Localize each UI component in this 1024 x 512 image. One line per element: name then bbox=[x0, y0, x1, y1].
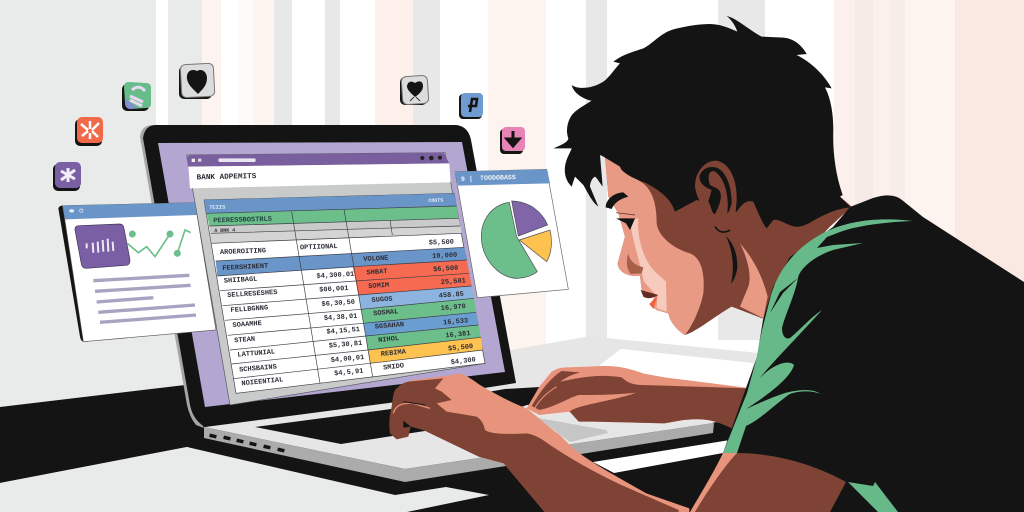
spreadsheet table: SGSAHAN bbox=[375, 321, 404, 332]
spreadsheet table: SOAAMHE bbox=[232, 320, 262, 330]
laptop bbox=[140, 125, 714, 482]
desk and floor surfaces bbox=[0, 336, 770, 512]
spreadsheet table: SUGOS bbox=[371, 296, 393, 305]
floating window: pie chart card: TOODOBASS bbox=[480, 173, 516, 182]
spreadsheet table: $6,500 bbox=[433, 265, 459, 274]
floating window: pie chart card bbox=[455, 169, 568, 298]
eyebrow bbox=[606, 192, 628, 209]
icon: blue app tile bbox=[459, 93, 483, 119]
spreadsheet table: $5,30,81 bbox=[329, 340, 363, 351]
spreadsheet table: STEAN bbox=[234, 336, 255, 345]
spreadsheet table: FEERSHINENT bbox=[222, 263, 269, 273]
person: green shirt highlights bbox=[723, 219, 913, 512]
window heading: BANK ADPEMITS bbox=[197, 173, 257, 182]
spreadsheet table: REBIMA bbox=[380, 348, 407, 359]
spreadsheet table: $6,30,50 bbox=[321, 299, 355, 309]
spreadsheet table: LATTUNIAL bbox=[237, 348, 276, 360]
icon: balloon tile bbox=[179, 63, 215, 99]
spreadsheet table: $00,001 bbox=[319, 285, 349, 295]
laptop lid bbox=[140, 125, 516, 428]
window heading bbox=[188, 163, 451, 188]
spreadsheet table: FELLBGNNG bbox=[230, 304, 269, 315]
icon: purple app tile bbox=[53, 162, 81, 191]
icon: green app tile bbox=[122, 82, 151, 111]
spreadsheet table: SHBAT bbox=[366, 268, 388, 277]
title bar bbox=[187, 153, 449, 167]
text lines bbox=[93, 275, 196, 322]
person: near hand on keyboard bbox=[389, 373, 689, 512]
spreadsheet table: 16,533 bbox=[443, 317, 469, 328]
spreadsheet table: PEERESSBOSTRLS bbox=[213, 216, 272, 225]
spreadsheet table: $4,15,51 bbox=[326, 326, 360, 337]
spreadsheet table: SCHSBAINS bbox=[239, 363, 277, 375]
person: black shirt bbox=[690, 195, 1024, 512]
spreadsheet table: $4,5,91 bbox=[334, 368, 364, 378]
spreadsheet table bbox=[204, 193, 485, 393]
spreadsheet table: $4,38,01 bbox=[324, 313, 358, 323]
spreadsheet table: 10,000 bbox=[432, 252, 457, 261]
spreadsheet table: $5,500 bbox=[448, 343, 474, 354]
spreadsheet table: NOIEENTIAL bbox=[241, 376, 284, 388]
spreadsheet table: COOTS bbox=[428, 198, 443, 204]
spreadsheet table: A BNK 4 bbox=[214, 227, 235, 234]
spreadsheet table: $4,300.01 bbox=[316, 271, 355, 281]
spreadsheet table: $4,00,01 bbox=[331, 354, 365, 365]
spreadsheet table: SHIIBAGL bbox=[224, 276, 258, 286]
icon: orange app tile bbox=[75, 117, 103, 146]
lips bbox=[641, 290, 658, 298]
spreadsheet table: AROEROITING bbox=[220, 247, 266, 257]
face light bbox=[605, 150, 704, 335]
spreadsheet table: SELLRESESHES bbox=[227, 289, 278, 300]
jaw crease bbox=[726, 236, 737, 284]
laptop base bbox=[204, 385, 714, 482]
spreadsheet table: SMIDO bbox=[383, 362, 405, 373]
icon: bar chart tile bbox=[75, 224, 130, 268]
neck and face shadow bbox=[605, 143, 852, 335]
floating window: pie chart card: 9 | bbox=[461, 175, 473, 183]
spreadsheet table: $4,300 bbox=[450, 356, 476, 367]
icon: heart tile bbox=[400, 75, 429, 105]
spreadsheet table: 458.85 bbox=[439, 291, 464, 301]
spreadsheet table: 25,501 bbox=[441, 277, 466, 287]
nose shade bbox=[627, 253, 643, 274]
hair bbox=[553, 16, 851, 228]
pie chart bbox=[481, 201, 551, 278]
spreadsheet table: NIHOL bbox=[378, 335, 399, 345]
spreadsheet table: 16,970 bbox=[441, 303, 466, 313]
spreadsheet table: SOSMAL bbox=[373, 308, 399, 318]
ear bbox=[695, 161, 737, 232]
spreadsheet table: TCIIS bbox=[209, 205, 226, 211]
spreadsheet table: VOLONE bbox=[363, 255, 389, 264]
floating window: analytics card bbox=[58, 203, 216, 342]
browser window with spreadsheet bbox=[187, 153, 485, 405]
spreadsheet table: OPTIIONAL bbox=[300, 243, 338, 252]
person: head bbox=[553, 16, 852, 335]
eye bbox=[616, 218, 635, 230]
line chart bbox=[127, 230, 191, 257]
person: forearm crossing shirt bbox=[690, 453, 846, 512]
icon: pink app tile bbox=[500, 127, 525, 154]
spreadsheet table: $5,500 bbox=[429, 239, 454, 248]
spreadsheet table: 16,381 bbox=[445, 330, 471, 340]
person: far hand on trackpad bbox=[527, 366, 752, 429]
spreadsheet table: SOMIM bbox=[368, 282, 389, 291]
face highlight bbox=[630, 218, 667, 312]
neck light bbox=[740, 243, 768, 318]
